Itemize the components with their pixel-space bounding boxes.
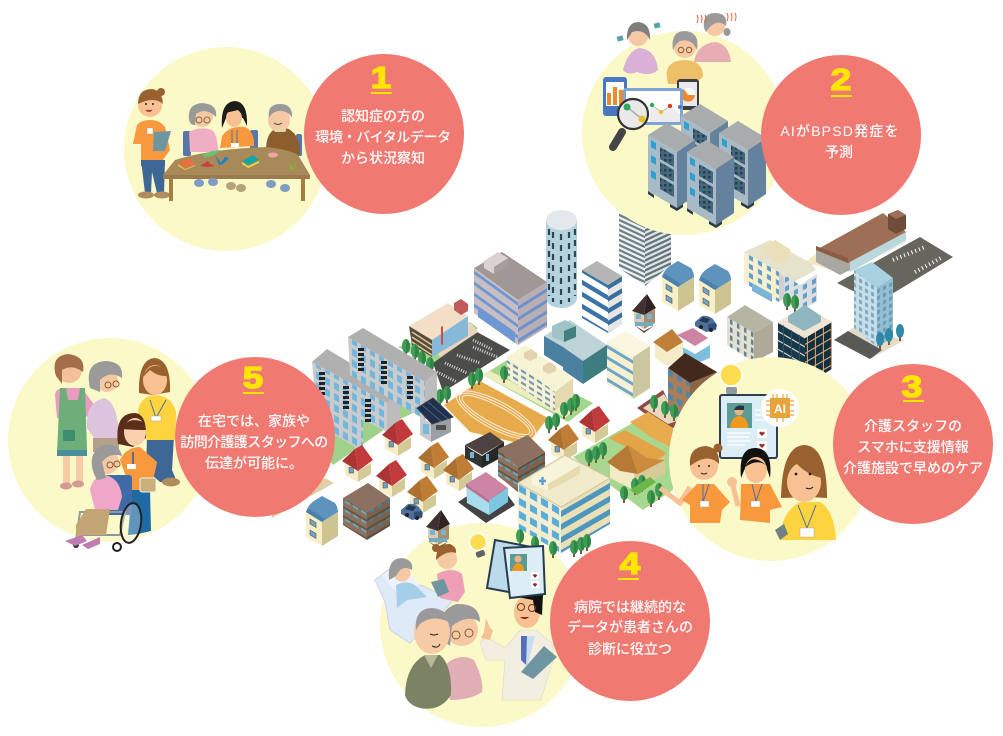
- building: dark brown roof apartment: [650, 353, 717, 425]
- staff with clipboard: [133, 88, 171, 198]
- building: small house above panel 4: [426, 510, 450, 549]
- illustration 1: care staff and elders folding origami: [133, 88, 310, 201]
- text block 4: [567, 599, 693, 657]
- server racks: [648, 104, 766, 228]
- text block 3: [843, 418, 983, 476]
- text block 1: [315, 108, 451, 166]
- panel 5: red circle with heading: [175, 357, 335, 517]
- magnifying glass: [613, 99, 648, 147]
- text block 4: 病院では継続的な: [574, 599, 686, 615]
- text block 1: から状況察知: [341, 150, 425, 166]
- text block 5: 在宅では、家族や: [198, 413, 310, 429]
- nurse in pink: [431, 544, 465, 602]
- panel 2: yellow circle: [582, 31, 786, 235]
- elder woman in pink: [189, 103, 218, 152]
- table with origami: [163, 147, 310, 201]
- number 2: 2: [831, 63, 851, 97]
- number 3: 3: [902, 370, 922, 404]
- number 1: 1: [371, 61, 391, 95]
- buildings: dark house and brown apartments: [343, 432, 545, 540]
- doctor: [480, 589, 557, 700]
- phone with pie chart: [677, 79, 699, 110]
- text block 5: [180, 413, 328, 471]
- panel 1: yellow circle: [124, 47, 328, 251]
- building: white and blue striped block: [582, 261, 622, 333]
- tablet: [720, 395, 777, 458]
- mother in green apron: [54, 354, 98, 490]
- text block 4: データが患者さんの: [567, 619, 693, 635]
- building: pink roof shop: [458, 472, 515, 523]
- woman in orange: [220, 101, 254, 148]
- building: cream and blue striped block: [607, 331, 650, 399]
- line chart card: [623, 88, 683, 125]
- text block 1: 認知症の方の: [341, 108, 425, 124]
- text block 3: 介護スタッフの: [864, 418, 962, 434]
- elder in pink: [694, 13, 736, 62]
- text block 5: 伝達が可能に。: [205, 455, 303, 471]
- building: beige low building with red roof box: [409, 299, 468, 357]
- buildings: orange roof cluster on green: [585, 412, 673, 507]
- building: hospital: [516, 455, 610, 558]
- city ground areas: [272, 237, 953, 518]
- man in brown: [266, 104, 300, 158]
- wheelchair and seated elder: [65, 444, 144, 551]
- panel 2: red circle with heading: [761, 55, 921, 215]
- chairs: [183, 130, 302, 156]
- building: grey beige block: [727, 305, 773, 362]
- houses: red and orange roof houses: [306, 406, 610, 546]
- buildings: school and trees: [402, 339, 580, 433]
- illustration 2: elders, data devices and servers: [603, 13, 766, 228]
- bed with patient: [375, 558, 453, 643]
- panel 5: yellow circle: [8, 338, 212, 542]
- elderly woman: [440, 604, 482, 700]
- text block 2: [780, 123, 900, 160]
- text block 4: 診断に役立つ: [588, 641, 672, 657]
- number 4: 4: [620, 547, 640, 581]
- elderly man: [405, 608, 451, 709]
- staff pushing wheelchair: [117, 413, 157, 535]
- building: grey office with blue bands: [474, 252, 547, 345]
- light bulb: [720, 364, 742, 394]
- buildings: pink shop and orange house: [653, 328, 710, 366]
- illustration 4: hospital bed, elders and doctor: [375, 534, 557, 709]
- AI chip icon: AI: [774, 402, 786, 416]
- AI chip icon: [761, 389, 799, 427]
- text block 5: 訪問介護護スタッフへの: [180, 434, 328, 450]
- phone with chart: [603, 77, 627, 116]
- elder in purple: [87, 361, 122, 452]
- staff three: [775, 445, 836, 540]
- building: cream office: [744, 240, 817, 312]
- panel 4: red circle with heading: [550, 541, 710, 701]
- panel 3: red circle with heading: [833, 364, 993, 524]
- text block 2: 予測: [825, 144, 853, 160]
- buildings: blue roofed houses and small house: [632, 261, 731, 333]
- panel 3: yellow circle: [669, 357, 873, 561]
- number 5: 5: [243, 361, 263, 395]
- staff two: [727, 448, 782, 523]
- panel 1: red circle with heading: [304, 54, 464, 214]
- illustration 3: care staff with AI support tablet: [660, 364, 836, 540]
- medical tablets: [487, 540, 545, 598]
- building: dark glass block: [778, 305, 832, 385]
- illustration 5: family and visiting care staff with wheelchair: [54, 354, 180, 551]
- text block 3: スマホに支援情報: [857, 439, 969, 455]
- building: striped tall tower: [619, 213, 671, 286]
- light bulb: [470, 534, 486, 558]
- building: brown roofed store: [816, 210, 906, 275]
- text block 2: AIがBPSD発症を: [780, 123, 900, 139]
- staff in yellow: [138, 358, 180, 486]
- building: teal low block: [544, 320, 607, 384]
- elder in purple: [617, 22, 661, 74]
- building: cylinder tower: [546, 210, 577, 308]
- buildings: three apartment slabs: [310, 328, 437, 452]
- text block 3: 介護施設で早めのケア: [843, 460, 983, 476]
- elder in yellow: [667, 31, 703, 84]
- building: solar roof house: [417, 398, 453, 442]
- panel 4: yellow circle: [380, 523, 584, 727]
- text block 1: 環境・バイタルデータ: [315, 129, 451, 145]
- staff one: [660, 444, 730, 523]
- building: light blue tower: [854, 262, 904, 349]
